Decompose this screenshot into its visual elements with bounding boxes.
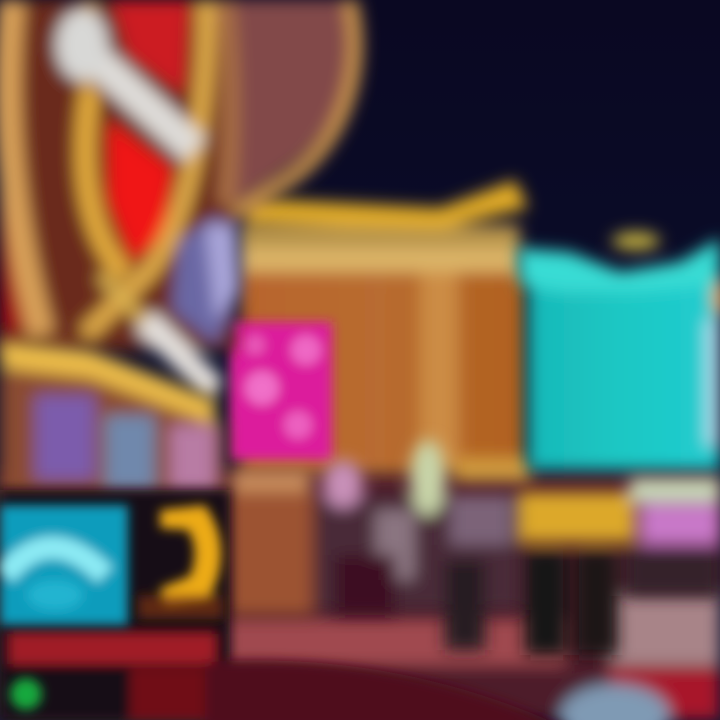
yellow arrow sign — [138, 505, 223, 619]
lower sign panel — [0, 340, 225, 495]
gold hotel building — [240, 180, 530, 482]
dark lower-left foreground — [0, 490, 570, 720]
glowing blue screen — [0, 505, 128, 625]
teal hotel building — [518, 232, 720, 470]
large casino sign — [0, 0, 356, 395]
street and crowd area — [0, 470, 720, 720]
pink checkered panel — [230, 322, 332, 460]
storefronts and crowd — [228, 440, 720, 655]
green indicator light — [10, 678, 42, 710]
